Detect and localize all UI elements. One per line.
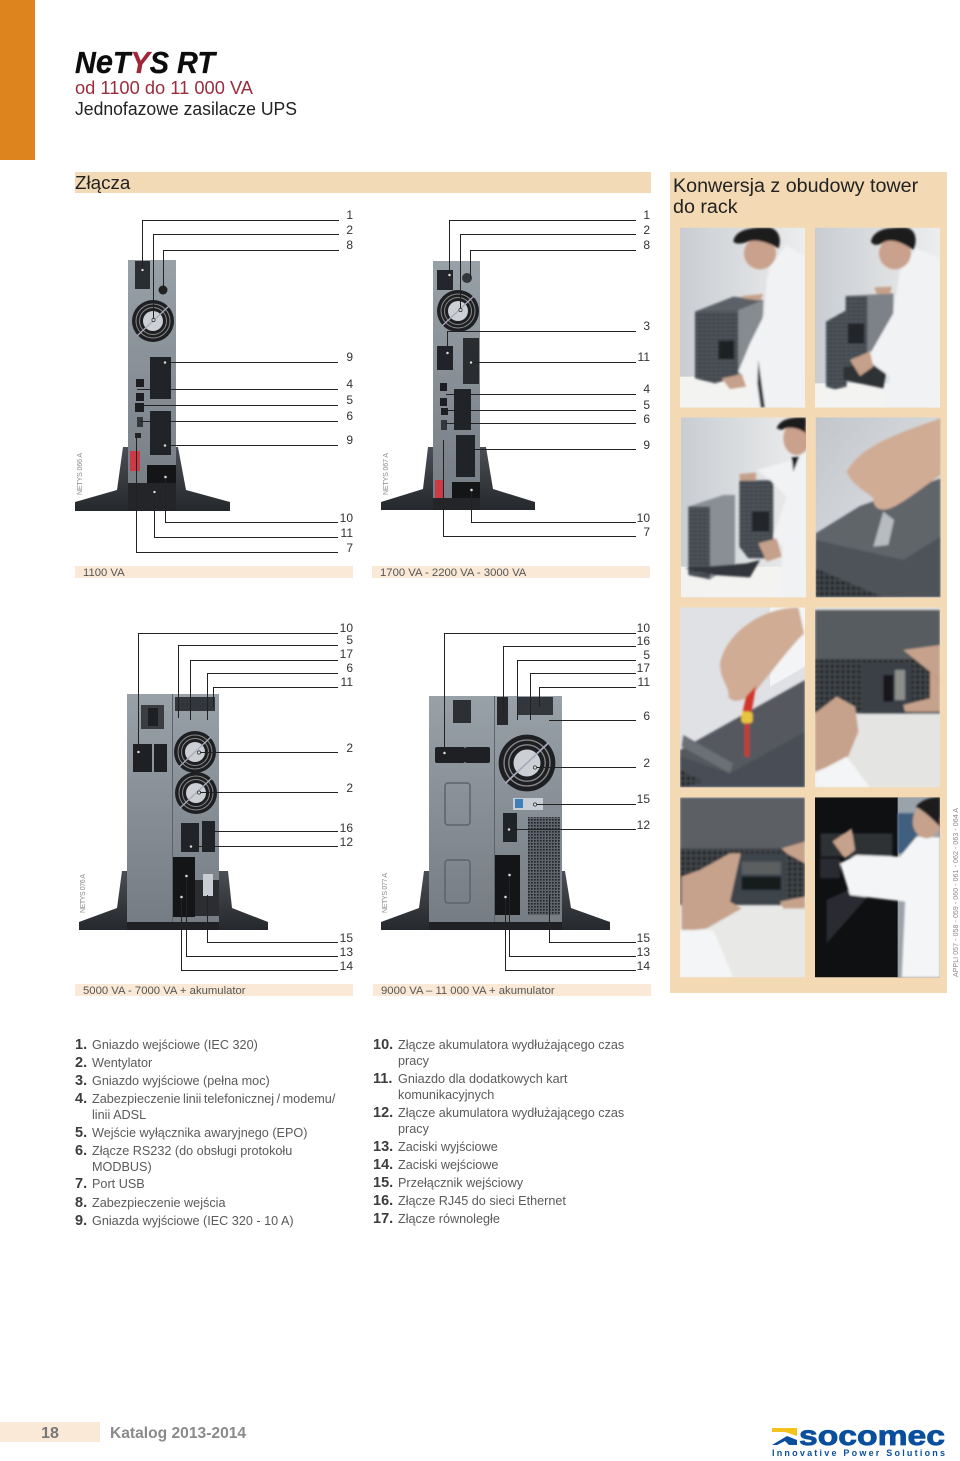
photo 5: screwdriver on UPS [680, 607, 805, 787]
panel: 5000-7000 VA connector diagram [75, 621, 353, 997]
connector numbers: 16 [340, 821, 353, 835]
photo 1: technician with UPS [680, 227, 805, 408]
legend: connectors 1-9: 5. [75, 1125, 87, 1141]
legend: connectors 1-9: Złącze RS232 (do obsługi protokołu [92, 1144, 292, 1158]
connector numbers: 14 [340, 959, 353, 973]
legend: connectors 10-17: Zaciski wyjściowe [398, 1140, 498, 1154]
connector numbers: 7 [346, 541, 353, 555]
connector numbers: 2 [346, 781, 353, 795]
caption: 1700-3000 VA [372, 566, 650, 579]
caption: 5000-7000 VA [75, 984, 353, 997]
photo 8: installing UPS in rack [815, 797, 941, 977]
connector numbers: 1 [346, 208, 353, 222]
connector numbers: 5 [643, 398, 650, 412]
leader lines [444, 220, 636, 536]
connector numbers: 6 [346, 409, 353, 423]
UPS rear view 1100 VA [75, 260, 230, 511]
legend: connectors 1-9: Wentylator [92, 1056, 152, 1070]
connector numbers: 11 [638, 350, 650, 364]
connector numbers: 5 [346, 633, 353, 647]
connector numbers: 1 [643, 208, 650, 222]
title: NeTYS RT logotype: NeTYS RT [75, 43, 218, 80]
legend: connectors 1-9: Zabezpieczenie linii telefonicznej / modemu/ [92, 1092, 336, 1106]
leader lines [443, 634, 636, 970]
legend: connectors 1-9: linii ADSL [92, 1108, 146, 1122]
connector numbers: 17 [340, 647, 353, 661]
legend: connectors 10-17: 14. [373, 1157, 393, 1173]
legend: connectors 1-9: MODBUS) [92, 1160, 152, 1174]
photo 4: hand peeling label [816, 417, 941, 597]
legend: connectors 10-17: 17. [373, 1211, 393, 1227]
connector numbers [340, 621, 353, 973]
connector numbers: 10 [637, 621, 650, 635]
connector numbers [637, 208, 650, 539]
legend: connectors 1-9: 9. [75, 1213, 87, 1229]
connector numbers: 4 [346, 377, 353, 391]
connector numbers: 2 [643, 756, 650, 770]
legend: connectors 1-9: Gniazdo wyjściowe (pełna moc) [92, 1074, 270, 1088]
legend: connectors 10-17: Gniazdo dla dodatkowych kart [398, 1072, 568, 1086]
UPS rear view 5000-7000 VA [79, 694, 268, 930]
connector numbers: 3 [643, 319, 650, 333]
caption: 1700-3000 VA: 1700 VA - 2200 VA - 3000 VA [380, 567, 527, 579]
caption: 5000-7000 VA: 5000 VA - 7000 VA + akumulator [83, 985, 246, 997]
connector numbers: 9 [346, 350, 353, 364]
legend: connectors 1-9: 3. [75, 1073, 87, 1089]
caption: 9000-11000 VA: 9000 VA – 11 000 VA + akumulator [381, 985, 555, 997]
reference code: photo credits: APPLI 057 - 058 - 059 - 060 - 061 - 062 - 063 - 064 A [953, 808, 960, 977]
logo: socomec: Innovative Power Solutions [772, 1448, 945, 1458]
legend: connectors 10-17: 10. [373, 1037, 393, 1053]
photo 7: pressing display panel [680, 797, 805, 977]
legend: connectors 1-9: 1. [75, 1037, 87, 1053]
reference code: NETYS 066 A [77, 453, 84, 495]
legend: connectors 10-17: Złącze RJ45 do sieci Ethernet [398, 1194, 566, 1208]
legend: connectors 10-17: pracy [398, 1054, 430, 1068]
connector numbers: 11 [341, 675, 353, 689]
heading: Złącza [75, 172, 651, 193]
reference code: NETYS 076 A [80, 874, 87, 913]
subtitle: power range: od 1100 do 11 000 VA [75, 78, 253, 98]
legend: connectors 1-9: 4. [75, 1091, 87, 1107]
panel: 1700-3000 VA connector diagram [372, 208, 650, 579]
panel: 9000-11000 VA connector diagram [373, 621, 651, 997]
legend: connectors 10-17: 12. [373, 1105, 393, 1121]
connector numbers: 13 [637, 945, 650, 959]
legend: connectors 10-17: Złącze akumulatora wydłużającego czas [398, 1106, 624, 1120]
connector numbers: 13 [340, 945, 353, 959]
connector numbers: 7 [643, 525, 650, 539]
logo: socomec [772, 1420, 945, 1458]
connector numbers: 15 [637, 792, 650, 806]
leader lines [136, 220, 339, 552]
panel: tower to rack conversion [670, 172, 947, 993]
legend: connectors 10-17: 16. [373, 1193, 393, 1209]
connector numbers: 17 [637, 661, 650, 675]
legend: connectors 10-17: Złącze akumulatora wydłużającego czas [398, 1038, 624, 1052]
connector numbers: 5 [643, 648, 650, 662]
orange corner tab [0, 0, 35, 160]
connector numbers: 6 [346, 661, 353, 675]
connector numbers: 15 [637, 931, 650, 945]
reference code: NETYS 067 A [383, 453, 390, 495]
connector numbers: 6 [643, 709, 650, 723]
footer: page number: 18 [41, 1425, 59, 1442]
legend: connectors 1-9: 6. [75, 1143, 87, 1159]
legend: connectors 10-17: Zaciski wejściowe [398, 1158, 498, 1172]
panel: 1100 VA connector diagram [75, 208, 353, 579]
connector numbers: 10 [637, 511, 650, 525]
heading: Złącza: Złącza [75, 172, 131, 193]
connector numbers: 2 [643, 223, 650, 237]
caption: 9000-11000 VA [373, 984, 651, 997]
legend: connectors 1-9: Gniazda wyjściowe (IEC 320 - 10 A) [92, 1214, 294, 1228]
connector numbers: 12 [637, 818, 650, 832]
connector numbers: 10 [340, 621, 353, 635]
legend: connectors 1-9: Port USB [92, 1177, 145, 1191]
reference code: NETYS 077 A [382, 873, 389, 913]
connector numbers: 9 [643, 438, 650, 452]
connector numbers: 8 [643, 238, 650, 252]
legend: connectors 1-9: Gniazdo wejściowe (IEC 320) [92, 1038, 258, 1052]
UPS rear view 9000-11000 VA [381, 696, 610, 930]
photo 2: technician removing stand [815, 227, 940, 408]
heading: conversion: do rack [673, 196, 738, 218]
connector numbers: 8 [346, 238, 353, 252]
connector numbers: 9 [346, 433, 353, 447]
connector numbers [340, 208, 353, 555]
leader lines [137, 634, 338, 970]
photo 3: technician with two units [681, 417, 810, 597]
legend: connectors 1-9: 7. [75, 1176, 87, 1192]
connector numbers [637, 621, 650, 973]
connector numbers: 14 [637, 959, 650, 973]
connector numbers: 10 [340, 511, 353, 525]
heading: conversion [673, 175, 919, 218]
connector numbers: 2 [346, 741, 353, 755]
connector numbers: 5 [346, 393, 353, 407]
connector numbers: 2 [346, 223, 353, 237]
connector numbers: 4 [643, 382, 650, 396]
legend: connectors 10-17 [373, 1037, 624, 1227]
legend: connectors 1-9 [75, 1037, 336, 1229]
legend: connectors 10-17: komunikacyjnych [398, 1088, 494, 1102]
legend: connectors 10-17: Przełącznik wejściowy [398, 1176, 524, 1190]
photo 6: fitting front panel [815, 607, 940, 787]
legend: connectors 10-17: 13. [373, 1139, 393, 1155]
legend: connectors 1-9: Wejście wyłącznika awaryjnego (EPO) [92, 1126, 307, 1140]
footer: catalogue year: Katalog 2013-2014 [110, 1425, 246, 1442]
legend: connectors 10-17: Złącze równoległe [398, 1212, 500, 1226]
legend: connectors 1-9: 2. [75, 1055, 87, 1071]
legend: connectors 10-17: 11. [373, 1071, 392, 1087]
connector numbers: 15 [340, 931, 353, 945]
connector numbers: 11 [341, 526, 353, 540]
legend: connectors 10-17: pracy [398, 1122, 430, 1136]
connector numbers: 6 [643, 412, 650, 426]
subtitle: product type: Jednofazowe zasilacze UPS [75, 99, 297, 119]
connector numbers: 16 [637, 634, 650, 648]
connector numbers: 11 [638, 675, 650, 689]
footer: page number [0, 1422, 100, 1442]
legend: connectors 1-9: 8. [75, 1195, 87, 1211]
heading: conversion: Konwersja z obudowy tower [673, 175, 919, 197]
logo: socomec: socomec [799, 1420, 945, 1451]
UPS rear view 1700-3000 VA [381, 261, 535, 510]
caption: 1100 VA [75, 566, 353, 579]
connector numbers: 12 [340, 835, 353, 849]
caption: 1100 VA: 1100 VA [83, 567, 125, 579]
icon: socomec mark [772, 1428, 797, 1445]
legend: connectors 10-17: 15. [373, 1175, 393, 1191]
legend: connectors 1-9: Zabezpieczenie wejścia [92, 1196, 226, 1210]
